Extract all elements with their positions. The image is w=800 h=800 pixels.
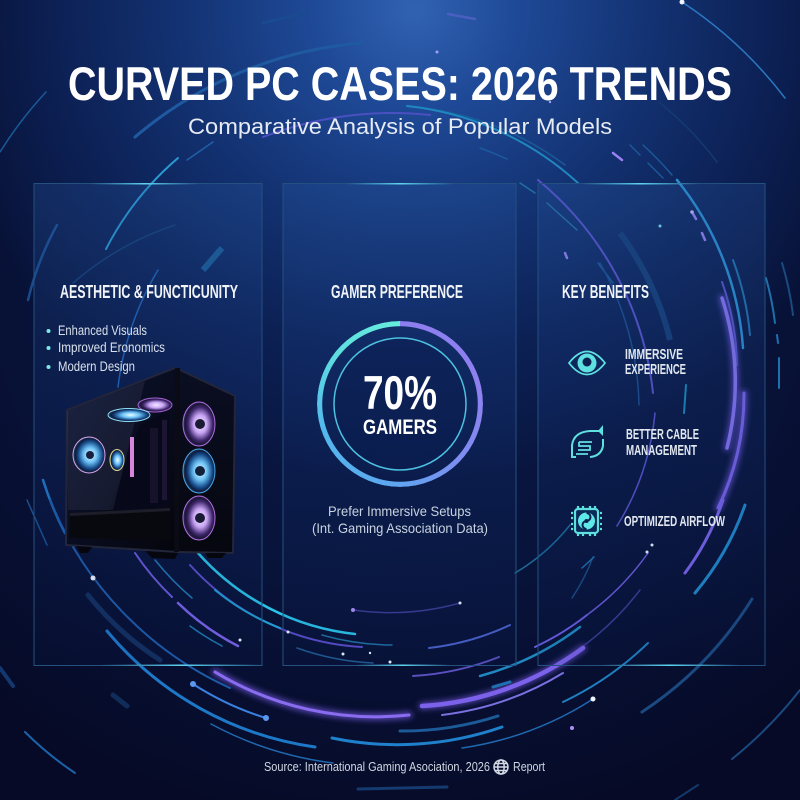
benefit: cable management: BETTER CABLE (626, 426, 699, 443)
icon: globe (494, 760, 508, 774)
panel: key benefits (538, 183, 765, 666)
ring caption: Prefer Immersive Setups (328, 503, 471, 519)
ring label: GAMERS (363, 416, 437, 439)
bullet list: Enhanced Visuals (58, 323, 147, 338)
bullet list: Improved Eronomics (58, 340, 165, 355)
heading: key benefits: KEY BENEFITS (562, 282, 649, 302)
benefit: cable management (626, 426, 699, 459)
icon: cable management (572, 425, 603, 457)
panel: aesthetic and functionality (34, 183, 265, 666)
top fans (138, 398, 172, 412)
right fans (183, 402, 215, 446)
heading: aesthetic and functionality: AESTHETIC & FUNCTICUNITY (60, 282, 238, 302)
benefit: immersive experience: EXPERIENCE (625, 361, 686, 378)
subtitle: Comparative Analysis of Popular Models (188, 114, 612, 139)
benefit: optimized airflow: OPTIMIZED AIRFLOW (624, 513, 726, 530)
source suffix: Report (513, 759, 545, 774)
left fans (73, 437, 105, 473)
ring inner circle (334, 338, 466, 470)
benefit: immersive experience (625, 346, 686, 378)
ring caption (312, 503, 488, 536)
benefit: immersive experience: IMMERSIVE (625, 346, 683, 363)
panel: gamer preference (283, 183, 516, 666)
bullet list: Modern Design (58, 359, 135, 374)
glass reflection (67, 381, 145, 510)
ring progress (317, 321, 483, 487)
internals (108, 410, 170, 512)
ring value: 70% (363, 366, 437, 419)
bullet list (46, 323, 165, 374)
benefit: cable management: MANAGEMENT (626, 442, 697, 459)
PC case illustration (66, 368, 235, 559)
icon: eye (569, 352, 605, 374)
source text: Source: International Gaming Asociation, 2026 (264, 759, 490, 774)
heading: gamer preference: GAMER PREFERENCE (331, 282, 463, 302)
ring caption: (Int. Gaming Association Data) (312, 520, 488, 536)
icon: airflow chip (571, 506, 602, 536)
feet (76, 546, 92, 553)
PSU shroud (69, 508, 171, 541)
